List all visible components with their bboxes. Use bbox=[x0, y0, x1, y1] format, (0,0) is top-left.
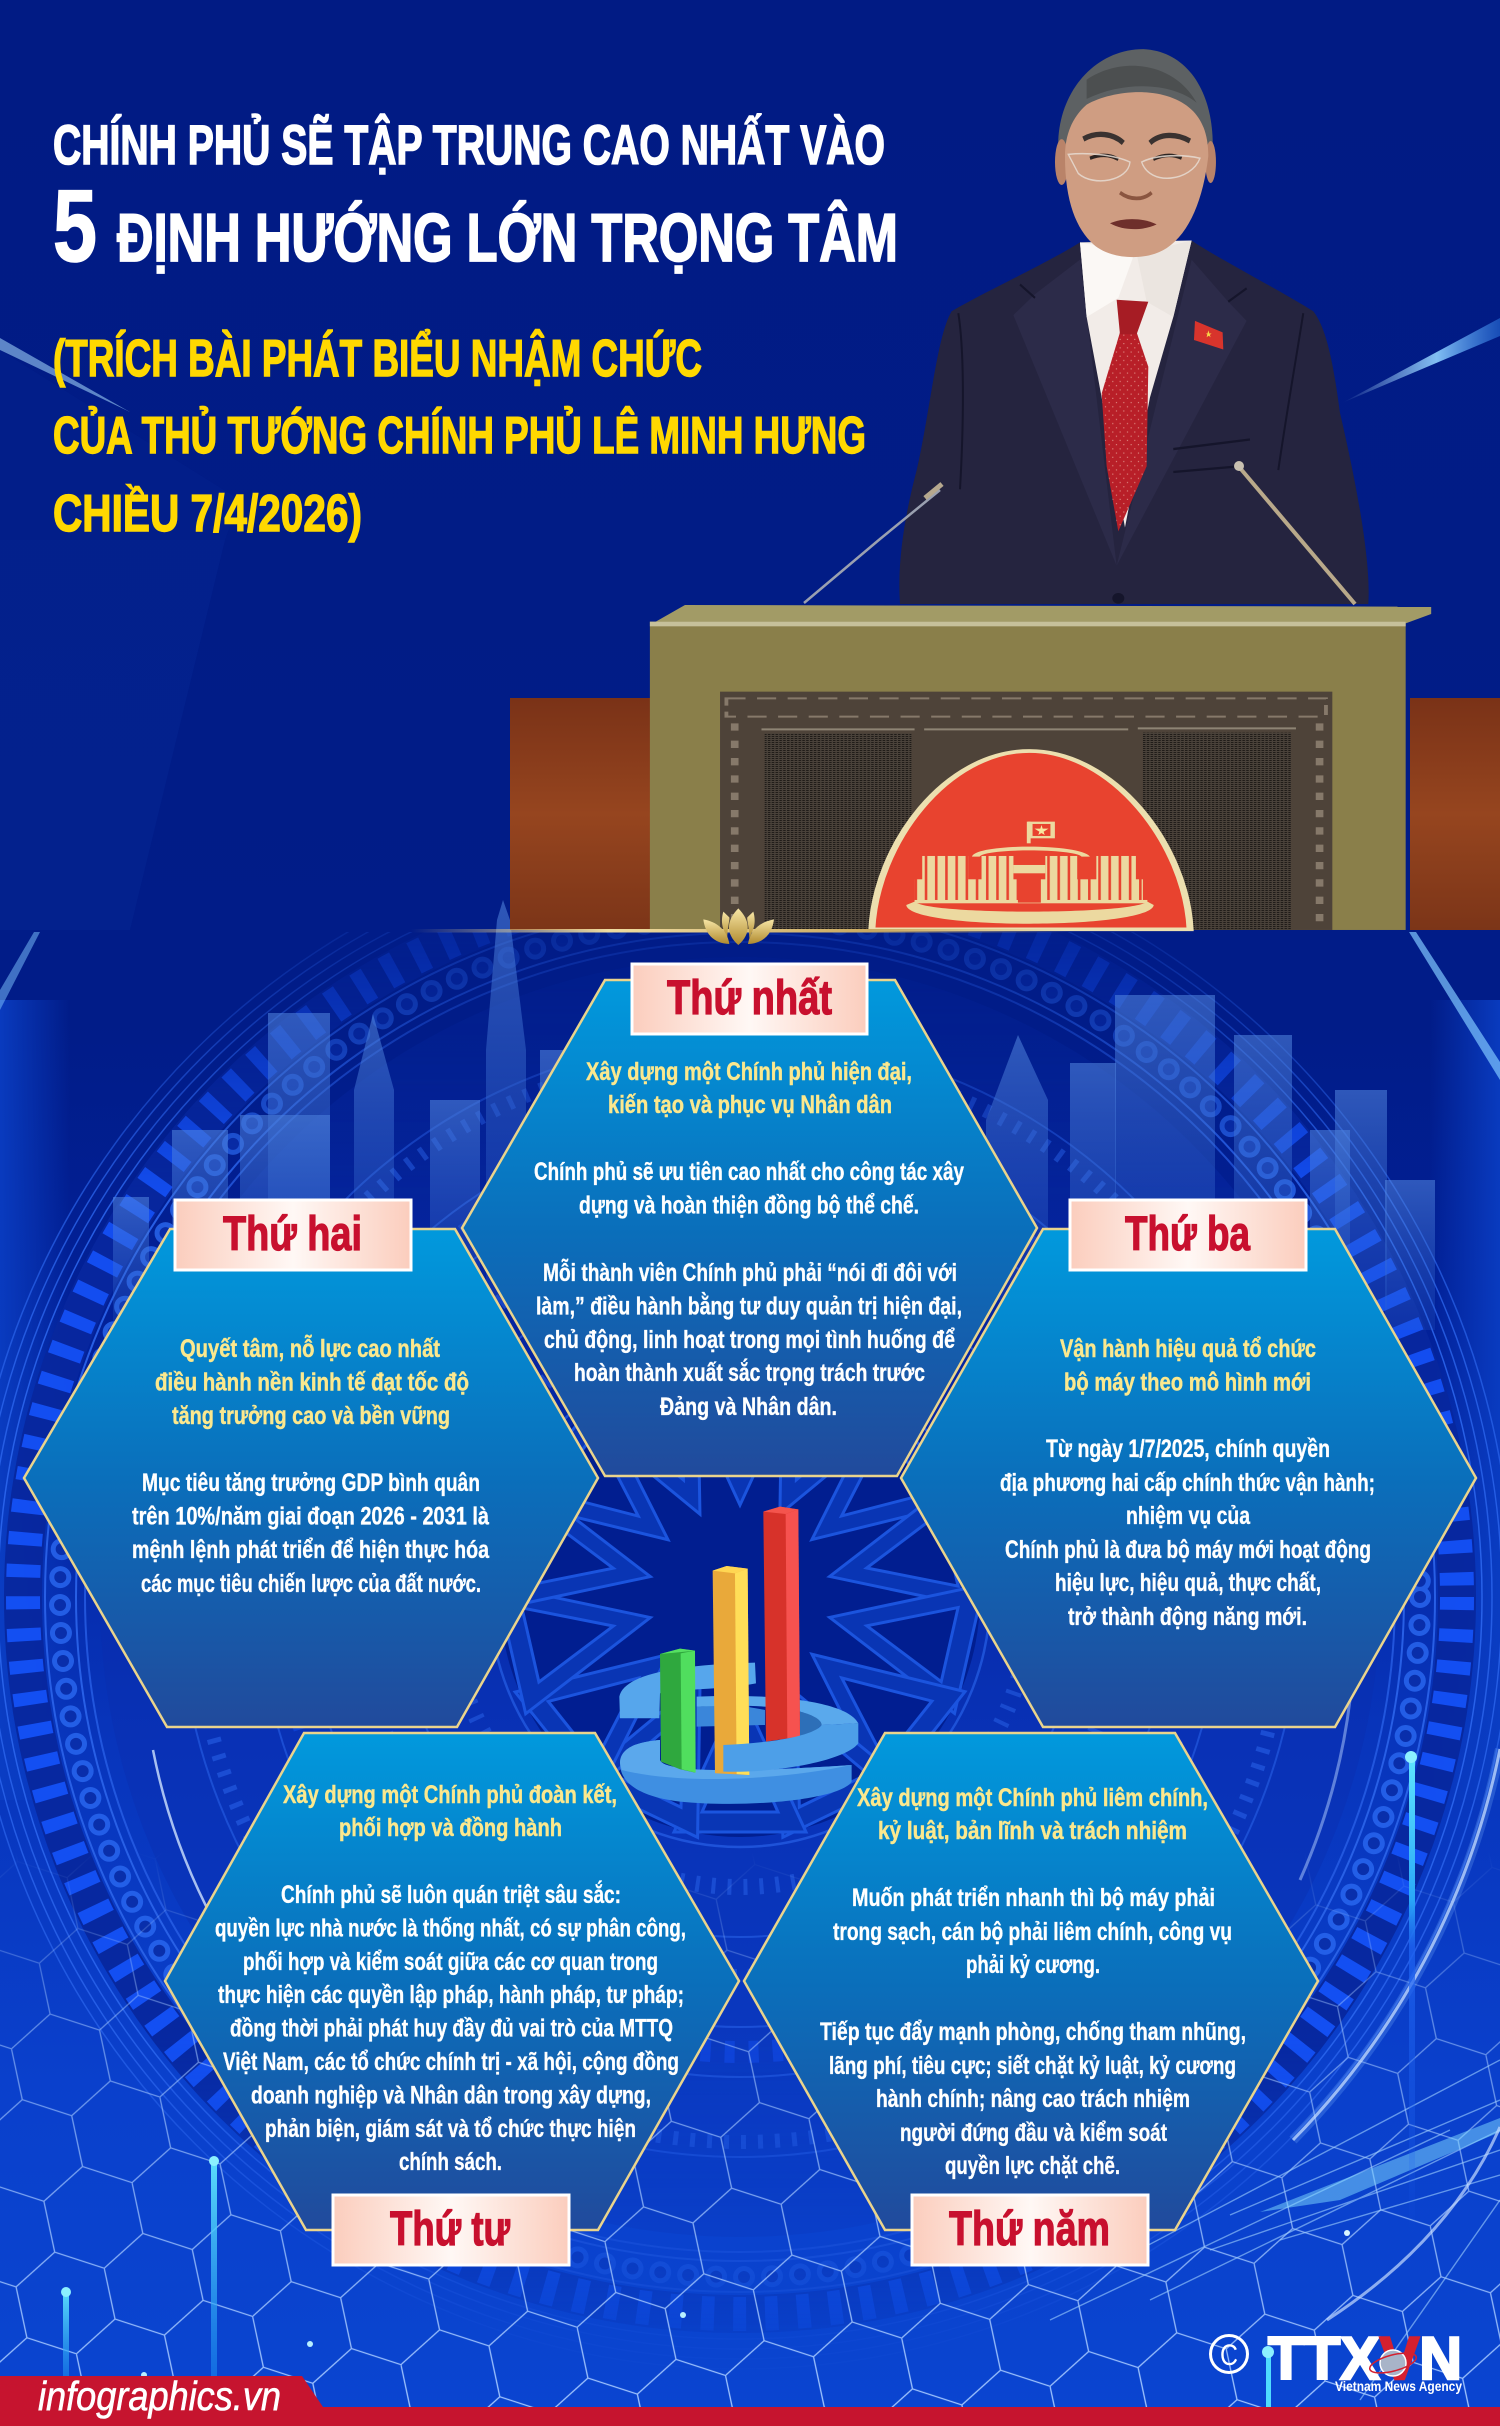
body text: hoàn thành xuất sắc trọng trách trước bbox=[574, 1357, 925, 1387]
emblem building bbox=[906, 822, 1154, 924]
person bbox=[899, 49, 1369, 604]
body text: trong sạch, cán bộ phải liêm chính, công vụ bbox=[833, 1918, 1232, 1946]
body text: hiệu lực, hiệu quả, thực chất, bbox=[1055, 1569, 1321, 1597]
background: city skyline bbox=[113, 900, 1435, 1330]
body text: Việt Nam, các tổ chức chính trị - xã hội, cộng đồng bbox=[223, 2048, 679, 2076]
heading bbox=[1060, 1335, 1316, 1396]
body text: chính sách. bbox=[399, 2148, 502, 2176]
wooden backdrop right bbox=[1410, 698, 1500, 930]
heading: Quyết tâm, nỗ lực cao nhất bbox=[180, 1333, 441, 1363]
label bbox=[912, 2195, 1148, 2265]
body text: lãng phí, tiêu cực; siết chặt kỷ luật, kỷ cương bbox=[829, 2052, 1236, 2080]
body text: doanh nghiệp và Nhân dân trong xây dựng, bbox=[251, 2082, 651, 2110]
chart: 3D bars with rings bbox=[619, 1507, 858, 1804]
heading bbox=[155, 1333, 469, 1430]
podium bbox=[650, 605, 1431, 930]
title line 2: 5 bbox=[53, 169, 97, 283]
heading bbox=[586, 1058, 912, 1119]
hexagon bbox=[901, 1229, 1476, 1727]
body text: quyền lực chặt chẽ. bbox=[945, 2152, 1120, 2180]
panel: Thứ ba bbox=[901, 1200, 1476, 1727]
glow arcs bbox=[1293, 1749, 1500, 2140]
hexagon bbox=[165, 1733, 739, 2230]
label bbox=[1070, 1200, 1306, 1270]
hexagon bbox=[24, 1229, 598, 1727]
background: hexagon network bbox=[0, 1700, 1500, 2426]
body text: người đứng đầu và kiểm soát bbox=[900, 2119, 1168, 2147]
microphone right bbox=[1234, 461, 1355, 604]
microphone left bbox=[804, 484, 942, 603]
heading bbox=[857, 1784, 1208, 1845]
heading bbox=[283, 1781, 617, 1842]
body text: Tiếp tục đẩy mạnh phòng, chống tham nhũng, bbox=[820, 2018, 1246, 2046]
heading: Xây dựng một Chính phủ đoàn kết, bbox=[283, 1781, 617, 1809]
subtitle: (TRÍCH BÀI PHÁT BIỂU NHẬM CHỨC bbox=[53, 329, 702, 388]
body text: Từ ngày 1/7/2025, chính quyền bbox=[1046, 1435, 1330, 1463]
body text: địa phương hai cấp chính thức vận hành; bbox=[1000, 1469, 1375, 1497]
body text: Đảng và Nhân dân. bbox=[660, 1393, 837, 1421]
hexagon bbox=[462, 980, 1037, 1476]
heading: Xây dựng một Chính phủ hiện đại, bbox=[586, 1058, 912, 1086]
title bbox=[53, 113, 898, 283]
body text: phải kỷ cương. bbox=[966, 1951, 1100, 1979]
body text: hành chính; nâng cao trách nhiệm bbox=[876, 2085, 1190, 2113]
subtitle bbox=[53, 329, 866, 543]
heading: tăng trưởng cao và bền vững bbox=[172, 1402, 450, 1430]
body text: trở thành động năng mới. bbox=[1068, 1603, 1307, 1631]
body text: trên 10%/năm giai đoạn 2026 - 2031 là bbox=[132, 1502, 489, 1530]
body text: Mỗi thành viên Chính phủ phải “nói đi đôi với bbox=[543, 1257, 957, 1287]
subtitle: CHIỀU 7/4/2026) bbox=[53, 484, 362, 543]
body text: Muốn phát triển nhanh thì bộ máy phải bbox=[852, 1884, 1215, 1912]
body text: phối hợp và kiểm soát giữa các cơ quan trong bbox=[243, 1948, 658, 1976]
logo: TTXVN: C bbox=[1220, 2339, 1238, 2372]
background: drum mandala pattern bbox=[0, 825, 1500, 2369]
body text: thực hiện các quyền lập pháp, hành pháp, tư pháp; bbox=[218, 1981, 684, 2009]
body text: nhiệm vụ của bbox=[1126, 1502, 1251, 1530]
body text: các mục tiêu chiến lược của đất nước. bbox=[141, 1570, 481, 1598]
speaker photo bbox=[510, 49, 1500, 930]
body text: đồng thời phải phát huy đầy đủ vai trò của MTTQ bbox=[230, 2014, 673, 2042]
footer bar bbox=[0, 2373, 1500, 2426]
body text: Chính phủ sẽ ưu tiên cao nhất cho công tác xây bbox=[534, 1158, 964, 1186]
emblem bbox=[872, 751, 1190, 929]
label bbox=[333, 2195, 569, 2265]
title line 2 text: ĐỊNH HƯỚNG LỚN TRỌNG TÂM bbox=[117, 199, 898, 276]
body text: chủ động, linh hoạt trong mọi tình huống để bbox=[544, 1326, 955, 1354]
body text bbox=[215, 1879, 686, 2176]
body text: quyền lực nhà nước là thống nhất, có sự phân công, bbox=[215, 1914, 686, 1942]
title line 1: CHÍNH PHỦ SẼ TẬP TRUNG CAO NHẤT VÀO bbox=[53, 113, 885, 176]
heading: kiến tạo và phục vụ Nhân dân bbox=[608, 1091, 892, 1119]
logo: TTXVN: TTXVN bbox=[1268, 2325, 1462, 2392]
heading: kỷ luật, bản lĩnh và trách nhiệm bbox=[878, 1817, 1187, 1845]
body text: dựng và hoàn thiện đồng bộ thể chế. bbox=[579, 1192, 919, 1220]
heading: bộ máy theo mô hình mới bbox=[1064, 1368, 1311, 1396]
logo: TTXVN: Vietnam News Agency bbox=[1335, 2379, 1462, 2394]
heading: phối hợp và đồng hành bbox=[339, 1814, 562, 1842]
body text bbox=[132, 1469, 490, 1598]
label: Thứ năm bbox=[949, 2203, 1110, 2256]
heading: Vận hành hiệu quả tổ chức bbox=[1060, 1335, 1316, 1363]
body text: Mục tiêu tăng trưởng GDP bình quân bbox=[142, 1469, 480, 1497]
gold divider bbox=[411, 929, 1067, 932]
panel: Thứ hai bbox=[24, 1200, 598, 1727]
heading: điều hành nền kinh tế đạt tốc độ bbox=[155, 1368, 469, 1396]
panel: Thứ nhất bbox=[462, 964, 1037, 1476]
body text: Chính phủ sẽ luôn quán triệt sâu sắc: bbox=[281, 1879, 621, 1909]
body text bbox=[820, 1884, 1246, 2180]
hexagon bbox=[744, 1733, 1318, 2230]
label: Thứ ba bbox=[1125, 1208, 1250, 1261]
subtitle: CỦA THỦ TƯỚNG CHÍNH PHỦ LÊ MINH HƯNG bbox=[53, 406, 866, 465]
label: Thứ nhất bbox=[667, 972, 832, 1025]
label: Thứ hai bbox=[223, 1208, 362, 1261]
label bbox=[632, 964, 867, 1034]
label bbox=[175, 1200, 411, 1270]
panel: Thứ năm bbox=[744, 1733, 1318, 2265]
label: Thứ tư bbox=[390, 2203, 510, 2256]
body text: làm,” điều hành bằng tư duy quản trị hiện đại, bbox=[536, 1290, 962, 1320]
body text bbox=[534, 1158, 964, 1421]
body text: Chính phủ là đưa bộ máy mới hoạt động bbox=[1005, 1536, 1371, 1564]
body text: phản biện, giám sát và tổ chức thực hiện bbox=[265, 2115, 636, 2143]
body text: mệnh lệnh phát triển để hiện thực hóa bbox=[132, 1536, 490, 1564]
heading: Xây dựng một Chính phủ liêm chính, bbox=[857, 1784, 1208, 1812]
icon: lotus bbox=[703, 908, 774, 945]
wooden backdrop left bbox=[510, 698, 652, 930]
body text bbox=[1000, 1435, 1375, 1631]
panel: Thứ tư bbox=[165, 1733, 739, 2265]
footer site name: infographics.vn bbox=[38, 2373, 281, 2419]
